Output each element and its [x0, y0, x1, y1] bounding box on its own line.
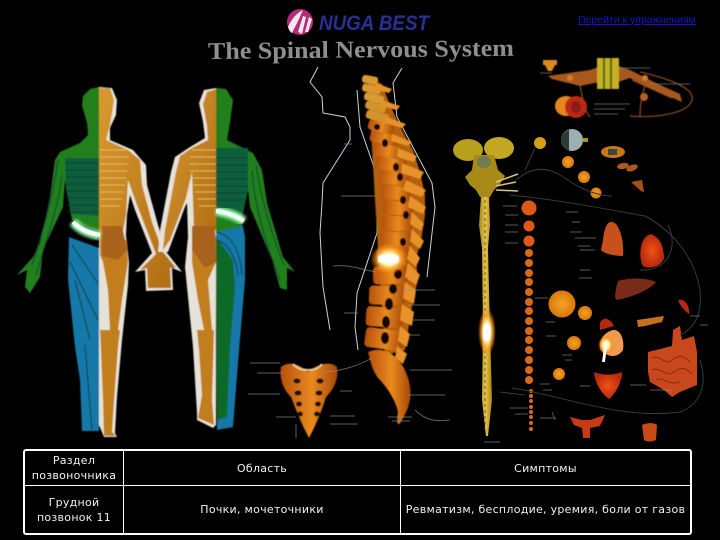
organ: uterus: [570, 415, 605, 438]
table cell: vertebra: Грудной: [49, 496, 99, 508]
organ: kidney: [600, 330, 623, 356]
organs: small head organs: [601, 146, 644, 192]
back body: green upper dermatomes: [216, 88, 295, 290]
front body: white skin half: [99, 87, 182, 437]
table cell: affected area: [124, 486, 401, 533]
logo: Nuga Best: NUGA BEST: [319, 12, 431, 35]
table header: section: [25, 451, 124, 486]
table cell: vertebra: позвонок 11: [37, 510, 111, 524]
spinal column: sacrum and coccyx: [368, 350, 410, 424]
nerve pathways: [500, 148, 703, 414]
table header: symptoms: [401, 451, 690, 486]
back body: dark green leg: [216, 237, 235, 420]
organ: pancreas: [637, 316, 664, 327]
spinal column: foramina: [374, 124, 409, 344]
back body: chest band: [216, 148, 248, 214]
figure: side body outline: [310, 67, 435, 350]
organ: intestines: [648, 326, 697, 397]
organ: liver: [615, 278, 656, 300]
figure: back body dermatomes and skeleton: [158, 88, 295, 430]
table header: area: [124, 451, 401, 486]
organ: adrenal: [600, 319, 614, 330]
diagram: brain stem and spinal cord: [453, 137, 518, 436]
organ: lung: [601, 222, 623, 256]
labels: faint organ captions: [484, 206, 708, 442]
link: top right navigation: Перейти к упражнениям: [578, 14, 696, 26]
figure: front body dermatomes and skeleton: [17, 87, 182, 437]
chart: nerve ganglion dot column: [522, 200, 536, 431]
highlight: kidney flash: [598, 335, 614, 362]
chart: autonomic ganglia discs: [534, 137, 602, 380]
table cell: affected area: Почки, мочеточники: [200, 503, 324, 516]
table: spinal section, area, symptoms: [23, 449, 692, 535]
highlight: spinal cord flash: [478, 308, 496, 356]
highlight: back body lumbar band: [216, 211, 244, 221]
highlight: spine flash: [370, 243, 408, 275]
table header: symptoms: Симптомы: [514, 462, 577, 474]
front body: green upper dermatomes: [17, 87, 99, 293]
highlight: front body lumbar band: [73, 222, 100, 236]
back body: blue leg band: [216, 226, 245, 430]
table header: section: Раздел: [53, 454, 95, 467]
front body: blue legs: [68, 237, 99, 431]
icon: eye: [561, 129, 588, 151]
organ: spleen: [678, 300, 689, 314]
table header: area: Область: [237, 462, 287, 474]
chart: spinal column vertebrae: [361, 74, 426, 424]
diagram: spinal cord cross-section top right: [540, 58, 692, 118]
front body: skeleton: [99, 88, 176, 288]
spinal column: spinous processes: [375, 83, 426, 364]
back body: white skin half: [158, 88, 216, 428]
table cell: vertebra: [25, 486, 124, 533]
labels: faint anatomical leader lines: [248, 144, 452, 438]
table header: section: позвоночника: [32, 469, 116, 482]
front body: chest band: [65, 158, 99, 216]
chart: sacrum detail: [281, 364, 337, 438]
title: The Spinal Nervous System: [208, 36, 514, 65]
organ: rectum: [642, 423, 657, 442]
back body: skeleton: [163, 89, 216, 250]
logo: Nuga Best: [287, 9, 431, 35]
cross-section: red vessel: [555, 96, 577, 116]
organ: heart: [640, 234, 664, 268]
spinal column: processes backing: [368, 78, 425, 355]
table cell: symptoms: Ревматизм, бесплодие, уремия, боли от газов: [406, 503, 685, 516]
organ: bladder: [594, 372, 622, 399]
